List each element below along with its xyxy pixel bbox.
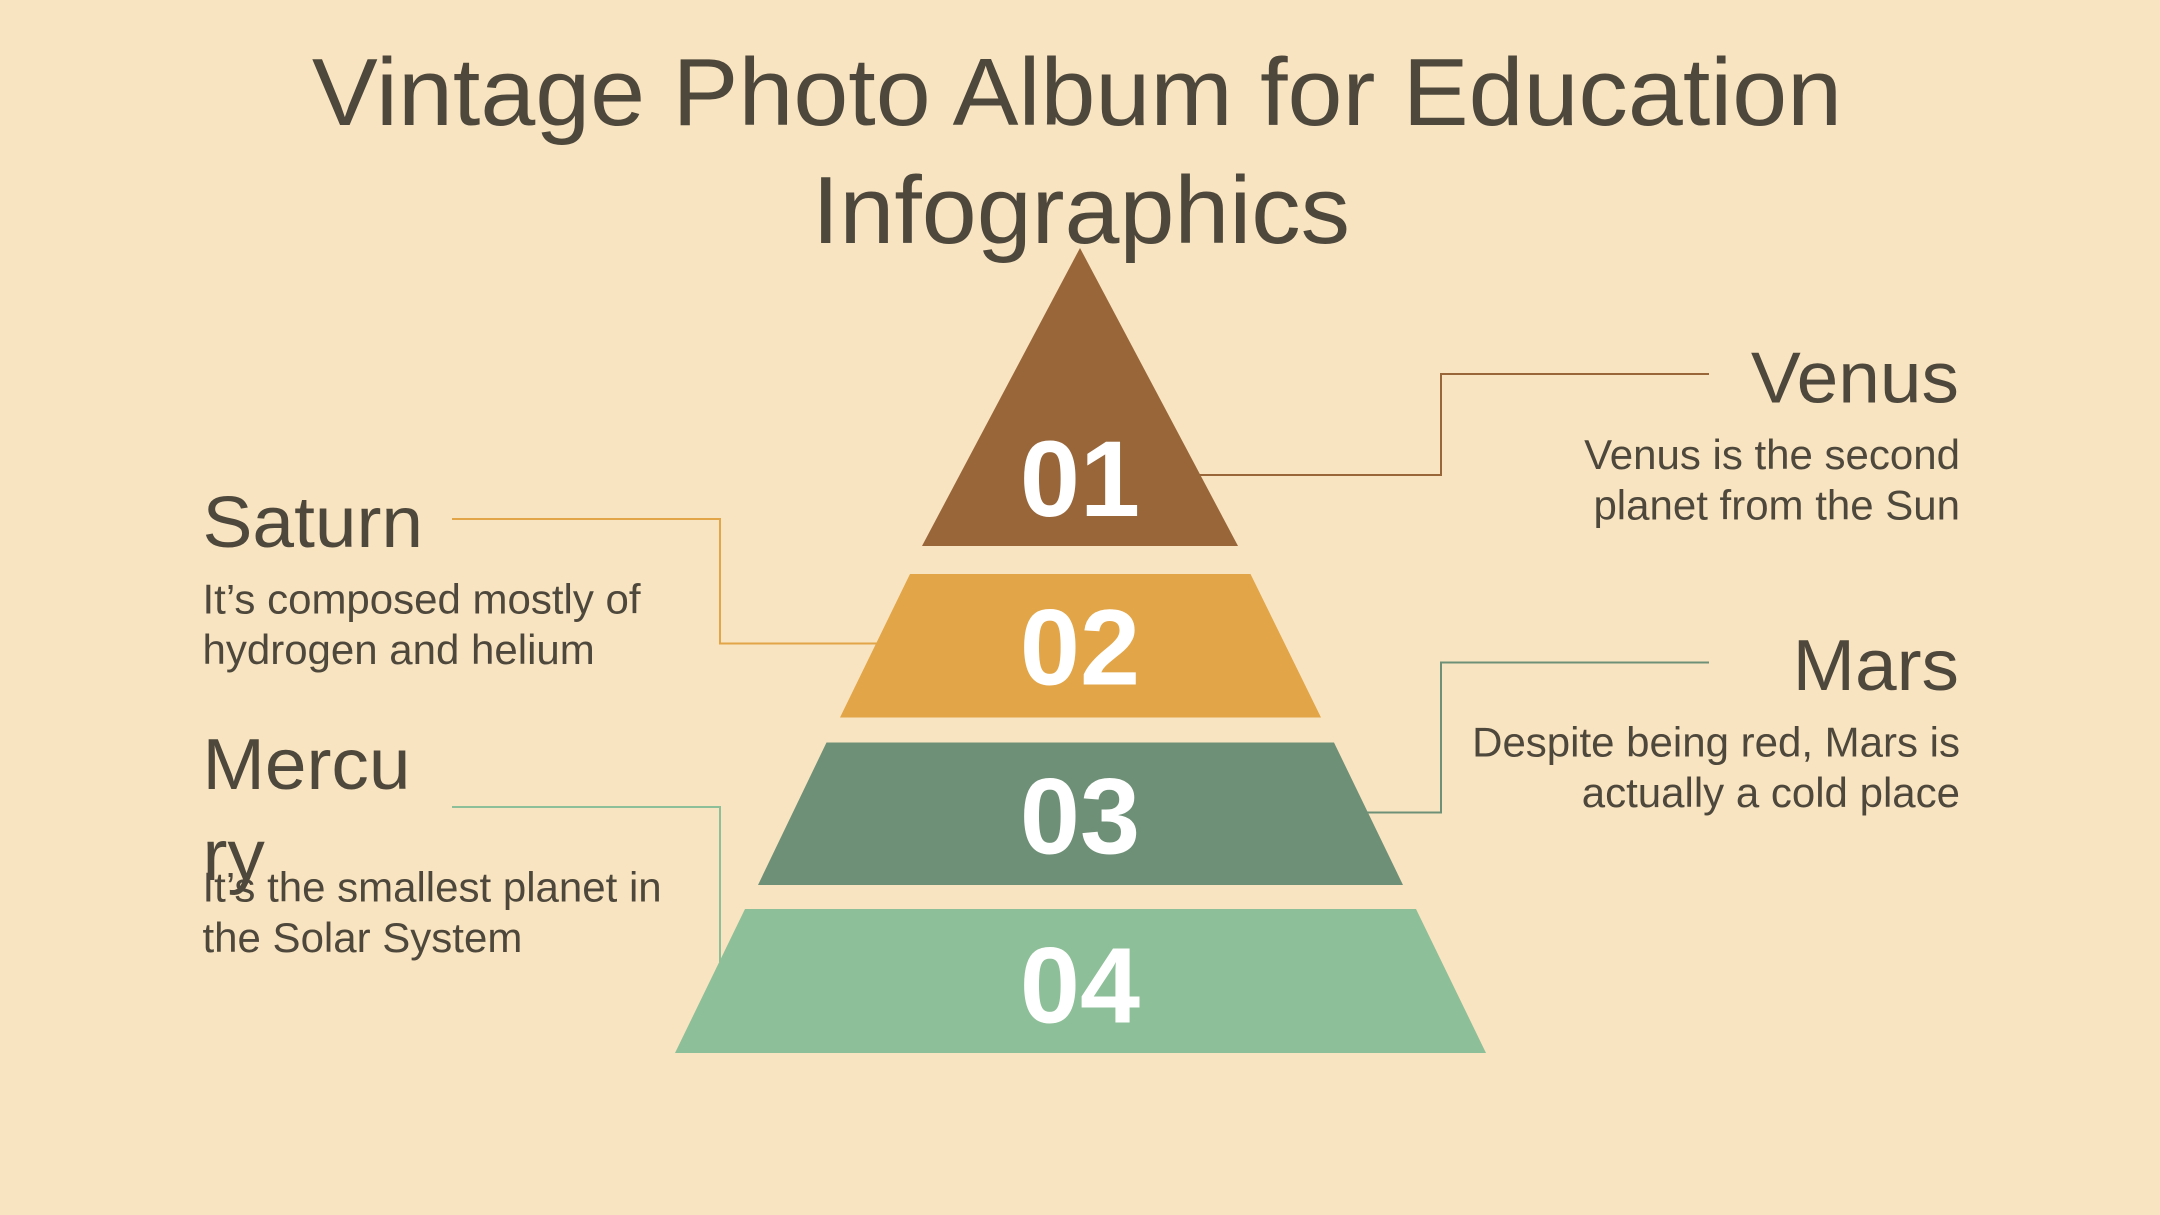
text block: Saturn: It’s composed mostly of [202, 576, 641, 623]
text block: Venus: Venus is the second [1584, 431, 1960, 478]
text block: Mercury: Mercu [202, 724, 411, 805]
pyramid tier 02: 02 [1020, 586, 1140, 708]
pyramid tier 01: 01 [1020, 418, 1140, 539]
text block: Mercury: the Solar System [202, 914, 522, 961]
text block: Venus [1584, 338, 1960, 528]
text block: Mercury [202, 724, 662, 961]
text block: Mercury: ry [202, 815, 265, 896]
title: Infographics [812, 156, 1350, 264]
text block: Saturn: hydrogen and helium [202, 626, 595, 673]
pyramid tier 03 [758, 742, 1403, 885]
text block: Mars: actually a cold place [1582, 769, 1960, 816]
text block: Saturn: Saturn [202, 482, 423, 563]
title [312, 38, 1842, 264]
connector line: Mercury [452, 807, 720, 962]
pyramid tier 01 [922, 248, 1238, 546]
pyramid tier 02 [840, 574, 1321, 718]
connector line: Mars [1365, 662, 1709, 812]
pyramid [675, 248, 1486, 1053]
text block: Venus: Venus [1751, 338, 1959, 418]
text block: Mars: Despite being red, Mars is [1472, 719, 1960, 766]
pyramid tier 04 [675, 909, 1486, 1053]
text block: Saturn [202, 482, 641, 673]
text block: Mercury: It’s the smallest planet in [202, 864, 662, 911]
text block: Mars: Mars [1793, 625, 1959, 706]
connector line: Saturn [452, 519, 878, 644]
title: Vintage Photo Album for Education [312, 38, 1842, 146]
pyramid tier 03: 03 [1020, 756, 1140, 876]
text block: Venus: planet from the Sun [1593, 481, 1960, 528]
connector line: Venus [1198, 374, 1709, 475]
pyramid tier 04: 04 [1020, 924, 1140, 1046]
text block: Mars [1472, 625, 1960, 816]
